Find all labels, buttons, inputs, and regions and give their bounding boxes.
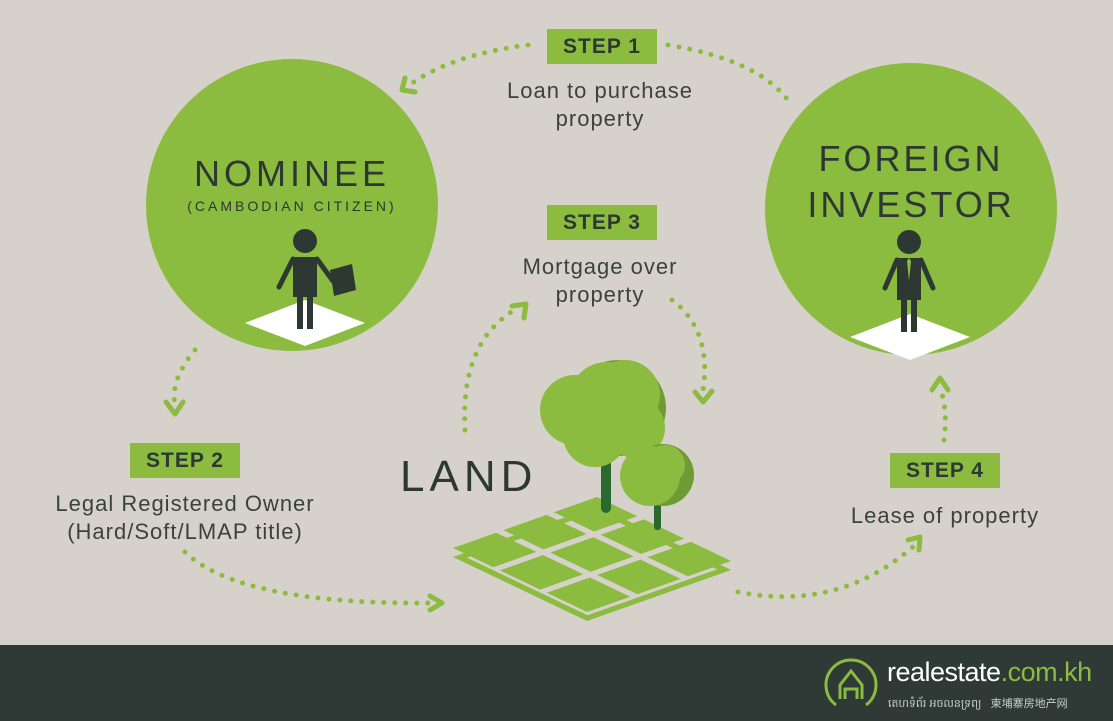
footer: តេហទំព័រ អចលនទ្រព្យ 柬埔寨房地产网 <box>888 698 1068 710</box>
step 2 label: STEP 2 <box>146 449 224 472</box>
foreign investor heading: FOREIGN <box>818 138 1004 179</box>
step 4 label: STEP 4 <box>906 459 984 482</box>
nominee heading: (CAMBODIAN CITIZEN) <box>187 198 397 214</box>
step 3 text: Mortgage over <box>523 254 677 279</box>
step 4 text: Lease of property <box>851 503 1039 528</box>
logo text: realestate.com.kh <box>887 657 1092 687</box>
nominee heading: NOMINEE <box>194 153 390 194</box>
step 3 label: STEP 3 <box>563 211 641 234</box>
logo icon <box>824 658 878 706</box>
step 3 label <box>547 205 657 240</box>
circle: nominee <box>146 59 438 351</box>
arrows <box>174 45 945 603</box>
step 1 text <box>507 78 693 131</box>
icon: land grid <box>453 497 731 621</box>
step 4 label <box>890 453 1000 488</box>
icon: nominee person <box>245 229 365 346</box>
step 2 text <box>55 491 315 544</box>
step 2 label <box>130 443 240 478</box>
step 1 text: property <box>556 106 644 131</box>
circle: foreign investor <box>765 63 1057 355</box>
step 2 text: Legal Registered Owner <box>55 491 315 516</box>
foreign investor heading <box>807 138 1015 225</box>
land heading: LAND <box>400 452 537 501</box>
nominee heading <box>187 153 397 214</box>
step 1 label: STEP 1 <box>563 35 641 58</box>
step 3 text <box>523 254 677 307</box>
icon: trees <box>540 360 694 530</box>
footer <box>0 645 1113 721</box>
step 2 text: (Hard/Soft/LMAP title) <box>67 519 303 544</box>
foreign investor heading: INVESTOR <box>807 184 1015 225</box>
arrowheads <box>166 78 948 610</box>
step 1 text: Loan to purchase <box>507 78 693 103</box>
icon: investor person <box>850 230 970 360</box>
step 3 text: property <box>556 282 644 307</box>
step 1 label <box>547 29 657 64</box>
